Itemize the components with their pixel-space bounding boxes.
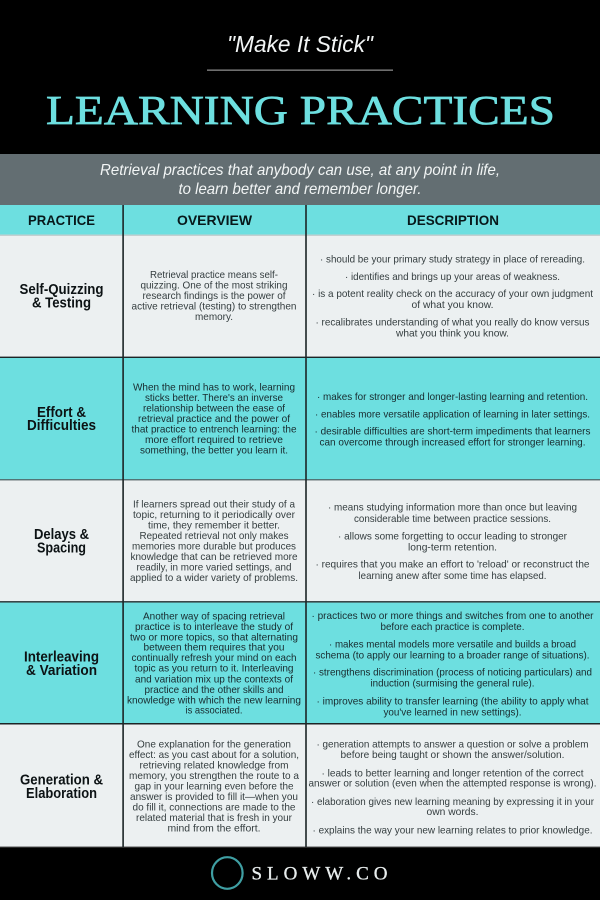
overview text: two or more topics, so that alternating [130,631,298,643]
overview text: answer is provided to fill it—when you [130,791,298,803]
description bullets: · improves ability to transfer learning (the ability to apply what [316,695,589,707]
overview text: practice is to interleave the study of [135,621,293,633]
overview text: research findings is the power of [142,290,286,302]
description bullets: of what you know. [412,299,494,311]
table header row: PRACTICE [28,212,95,228]
overview text: memory. [195,311,233,323]
overview text: knowledge that can be retrieved more [130,551,298,563]
overview text: knowledge with which the new learning [127,694,301,706]
subtitle band: to learn better and remember longer. [178,181,422,198]
overview text: If learners spread out their study of a [133,498,295,510]
description bullets: · enables more versatile application of learning in later settings. [315,408,590,420]
description bullets [312,254,593,340]
overview text: active retrieval (testing) to strengthen [132,300,297,312]
description bullets: · should be your primary study strategy in place of rereading. [320,254,585,266]
description bullets: considerable time between practice sessions. [354,513,551,525]
overview text: When the mind has to work, learning [133,382,295,394]
overview text: do fill it, connections are made to the [132,802,296,814]
overview text [132,382,297,456]
description bullets: own words. [426,806,478,818]
overview text: applied to a wider variety of problems. [130,572,298,584]
overview text: Repeated retrieval not only makes [140,530,288,542]
practice name: Spacing [37,540,86,556]
overview text: continually refresh your mind on each [132,652,297,664]
row 4: interleaving and variation [0,602,600,724]
overview text: something, the better you learn it. [140,444,288,456]
description bullets: · means studying information more than once but leaving [328,502,577,514]
description bullets: · leads to better learning and longer retention of the correct [322,767,584,779]
practice name: Delays & [34,527,89,543]
practice name: Effort & [37,405,86,421]
practice name [27,405,96,434]
overview text: relationship between the ease of [143,402,285,414]
description bullets: before being taught or shown the answer/solution. [340,749,564,761]
overview text: time, they remember it better. [148,520,280,532]
description bullets: before each practice is complete. [380,621,524,633]
overview text: mind from the effort. [168,823,260,835]
footer logo [212,857,388,889]
overview text [132,269,297,323]
overview text [127,610,301,717]
description bullets: long-term retention. [408,542,497,554]
row 5: generation and elaboration [0,724,600,847]
practice name: Elaboration [26,786,97,802]
description bullets: · makes mental models more versatile and builds a broad [329,638,576,650]
overview text [129,739,299,835]
quote title: "Make It Stick" [227,31,375,57]
description bullets: · practices two or more things and switches from one to another [312,610,594,622]
overview text: quizzing. One of the most striking [140,280,288,292]
practice name [24,650,99,679]
overview text: between them requires that you [144,642,285,654]
overview text: topic, returning to it periodically over [133,509,295,521]
description bullets [308,739,596,836]
row 3: delays and spacing [0,480,600,602]
overview text [130,498,298,584]
description bullets [312,610,594,718]
overview text: Retrieval practice means self- [150,269,278,281]
icon: ring [212,857,243,889]
overview text: retrieving related knowledge from [140,760,289,772]
description bullets: you've learned in new settings). [384,706,522,718]
overview text: retrieval practice and the power of [138,413,290,425]
description bullets: · allows some forgetting to occur leading to stronger [338,530,567,542]
overview text: and variation mix up the contexts of [135,673,293,685]
description bullets [314,391,590,448]
description bullets: · generation attempts to answer a question or solve a problem [316,739,589,751]
overview text: memory, you strengthen the route to a [129,770,299,782]
overview text: related material that is fresh in your [136,812,292,824]
description bullets: can overcome through increased effort for stronger learning. [320,436,586,448]
subtitle band: Retrieval practices that anybody can use, at any point in life, [100,162,500,179]
brand name: SLOWW.CO [252,864,388,884]
practice name: Self-Quizzing [20,282,104,298]
description bullets: · desirable difficulties are short-term impediments that learners [314,425,590,437]
overview text: One explanation for the generation [137,739,291,751]
overview text: effect: as you cast about for a solution, [129,749,299,761]
table header row [0,205,600,235]
practice name: & Testing [32,296,91,312]
overview text: Another way of spacing retrieval [143,610,285,622]
practice name: Generation & [20,773,103,789]
description bullets: · recalibrates understanding of what you really do know versus [316,316,590,328]
overview text: readily, in more varied settings, and [136,562,292,574]
row 1: self-quizzing and testing [0,235,600,357]
description bullets: induction (surmising the general rule). [370,678,534,690]
overview text: topic as you return to it. Interleaving [134,663,294,675]
description bullets: · requires that you make an effort to 'reload' or reconstruct the [316,558,590,570]
description bullets: · explains the way your new learning relates to prior knowledge. [312,824,592,836]
practice name [20,282,104,312]
overview text: memories more durable but produces [132,540,296,552]
practice name [20,773,103,802]
overview text: more effort required to retrieve [145,434,283,446]
description bullets: · identifies and brings up your areas of weakness. [345,271,560,283]
table header row: DESCRIPTION [407,212,499,228]
overview text: that practice to entrench learning: the [132,424,297,436]
description bullets: what you think you know. [395,328,509,340]
overview text: practice and the other skills and [144,684,284,696]
description bullets: learning anew after some time has elapsed. [358,570,546,582]
overview text: sticks better. There's an inverse [145,392,283,404]
practice name: & Variation [26,663,97,679]
row 2: effort and difficulties [0,357,600,480]
description bullets: · is a potent reality check on the accuracy of your own judgment [312,288,593,300]
description bullets: schema (to apply our learning to a broader range of situations). [316,649,590,661]
subtitle band [0,154,600,205]
main title: LEARNING PRACTICES [46,87,555,133]
description bullets [316,502,590,582]
practice name: Interleaving [24,650,99,666]
header block [46,31,555,133]
practice name: Difficulties [27,418,96,434]
practice name [34,527,89,556]
description bullets: · makes for stronger and longer-lasting learning and retention. [317,391,588,403]
overview text: is associated. [186,705,242,717]
overview text: gap in your learning even before the [134,781,294,793]
table header row: OVERVIEW [177,212,253,228]
